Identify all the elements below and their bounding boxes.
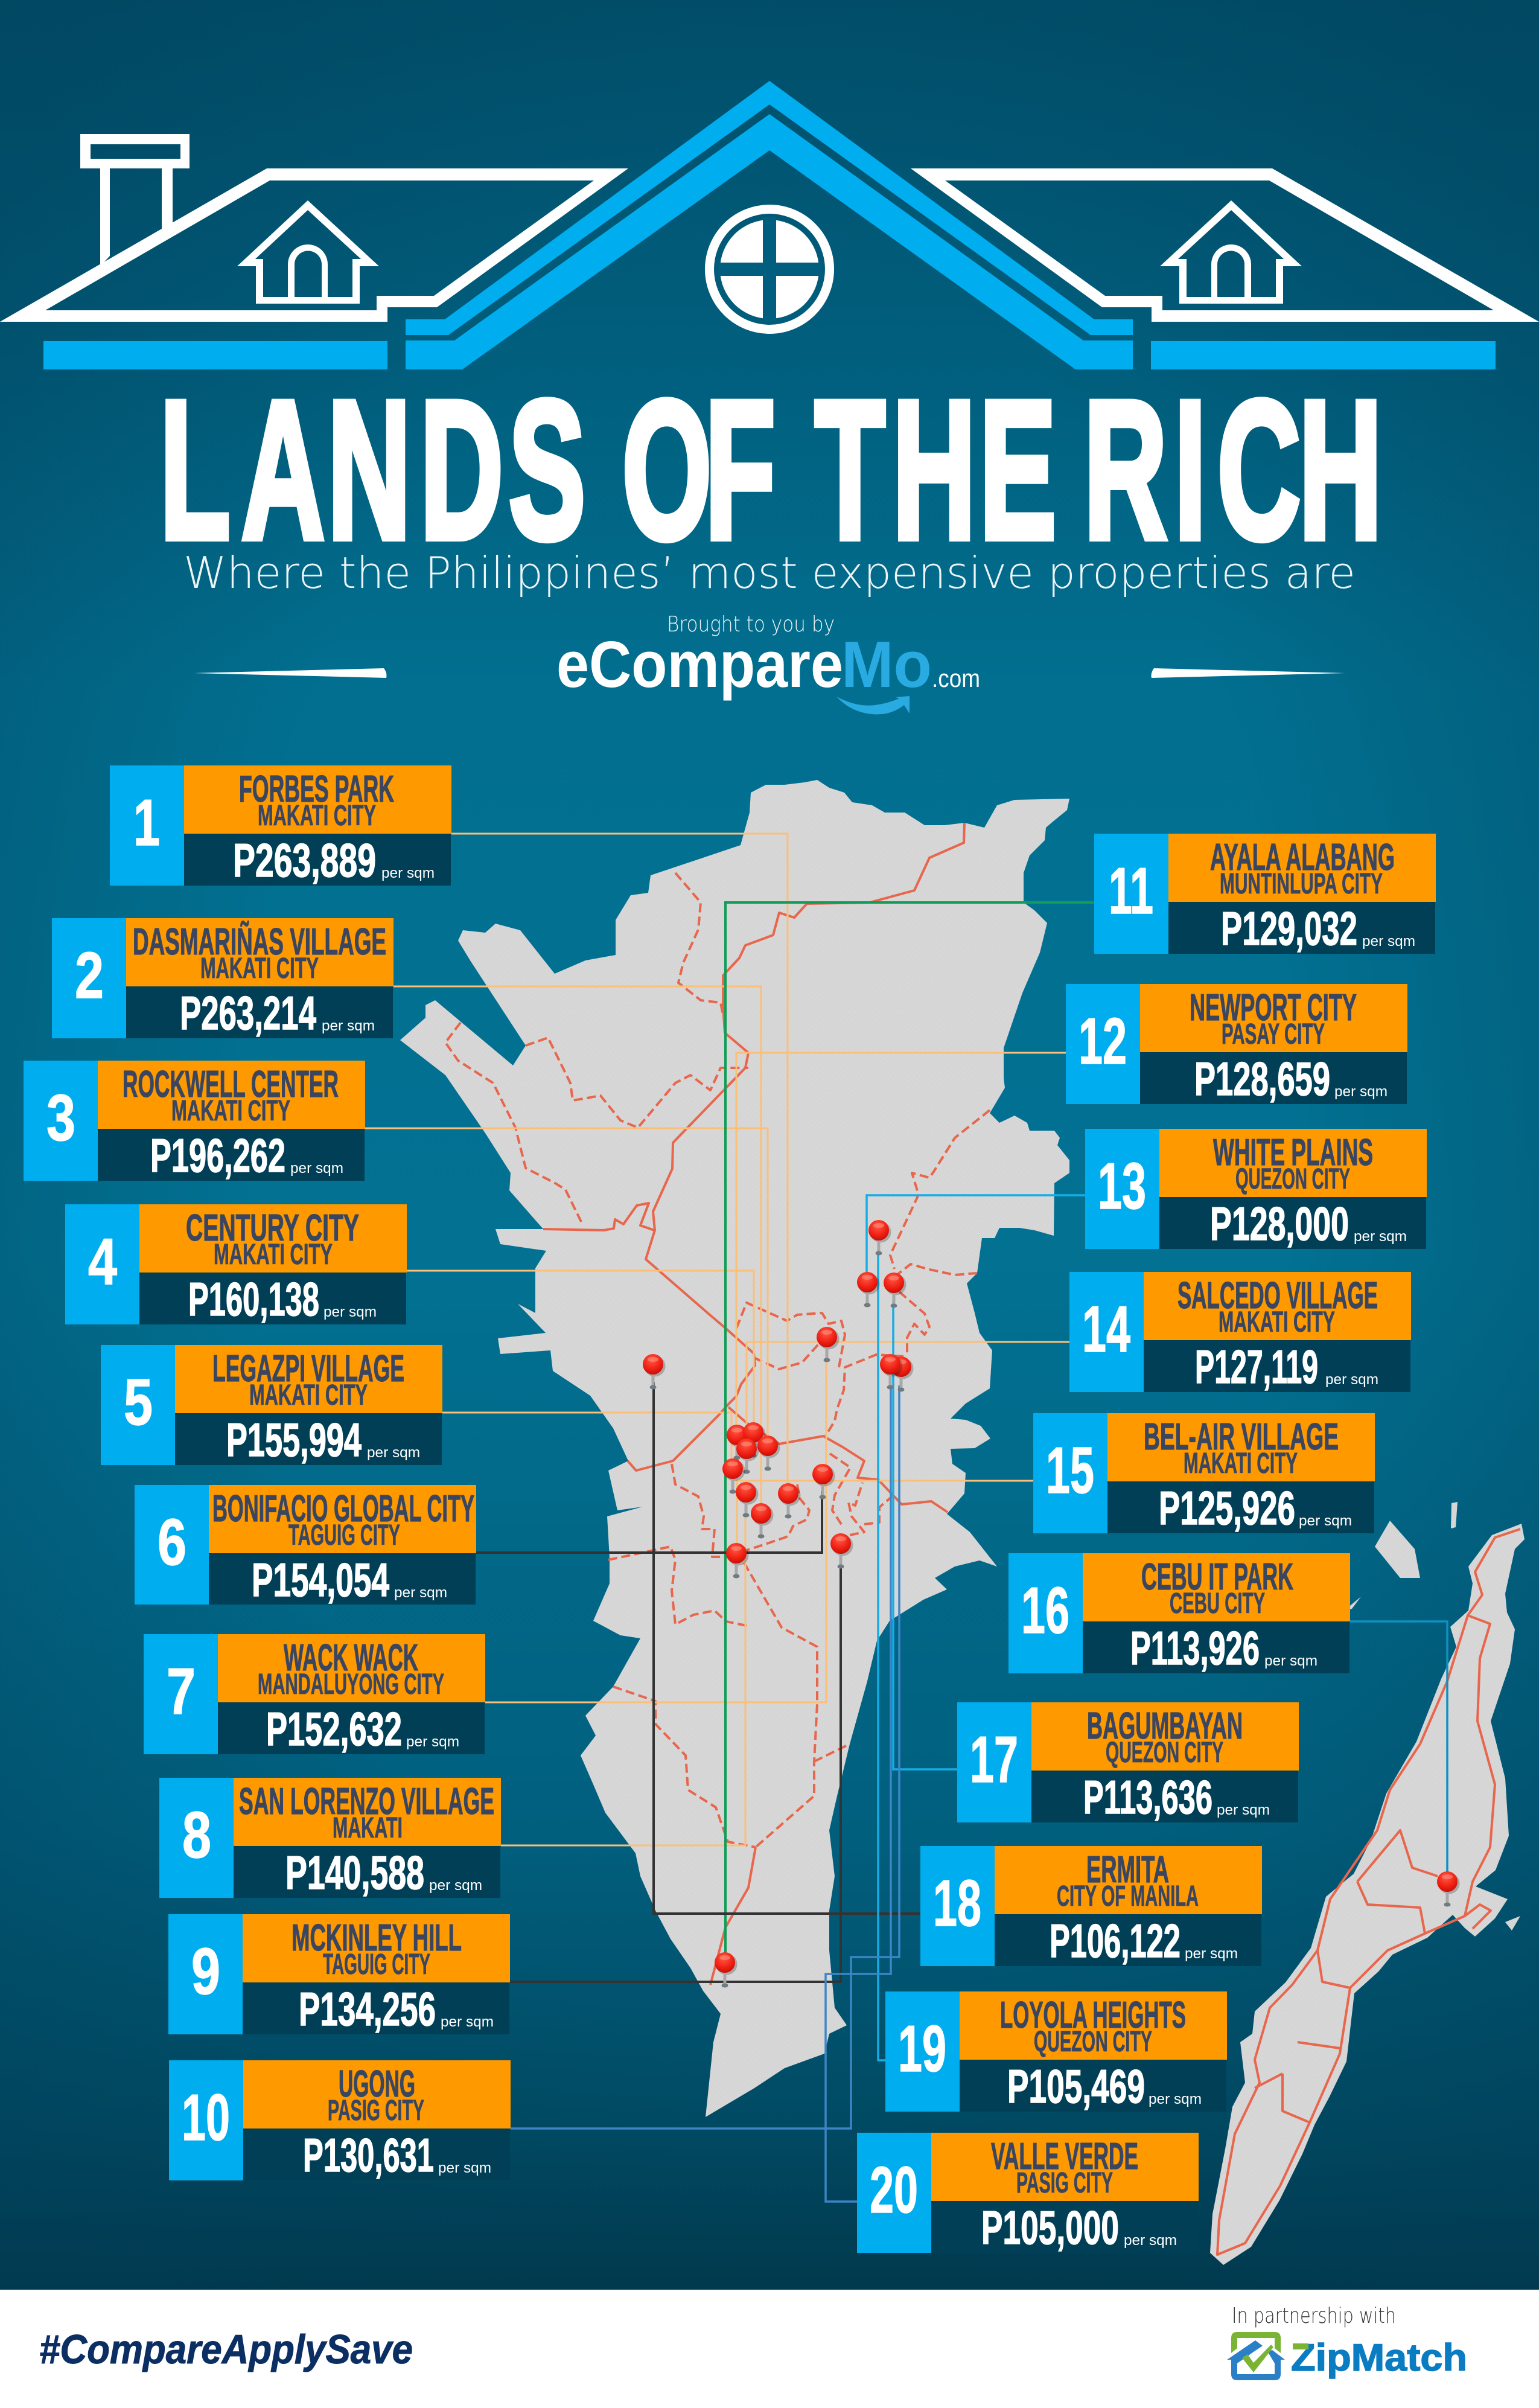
card 9: McKinley Hill: 9 [191,1935,220,2008]
eCompareMo logo [556,628,980,714]
card 12: Newport City: P128,659 [1194,1052,1330,1105]
card 13: White Plains: QUEZON CITY [1235,1163,1350,1195]
connector: card 20 [826,1385,891,2202]
card 1: Forbes Park: 1 [133,786,160,860]
ZipMatch logo: ZipMatch [1291,2337,1467,2379]
card 3: Rockwell Center: 3 [46,1081,75,1155]
card 20: Valle Verde: P105,000 [981,2201,1119,2254]
card 5: Legazpi Village: LEGAZPI VILLAGE [212,1348,404,1390]
connector: card 3 [365,1128,768,1446]
card 14: Salcedo Village: per sqm [1325,1372,1378,1388]
card 11: Ayala Alabang: MUNTINLUPA CITY [1220,868,1383,900]
card 6: Bonifacio Global City [135,1485,476,1606]
card 16: Cebu IT Park: per sqm [1264,1653,1318,1669]
card 11: Ayala Alabang [1094,834,1436,955]
card 16: Cebu IT Park: CEBU CITY [1170,1588,1265,1620]
card 13: White Plains [1085,1129,1427,1250]
card 20: Valle Verde: 20 [870,2153,918,2227]
card 7: Wack Wack: 7 [167,1655,196,1728]
hashtag: #CompareApplySave [39,2327,413,2372]
card 8: San Lorenzo Village: MAKATI [333,1812,403,1844]
card 15: Bel-Air Village: 15 [1046,1434,1094,1507]
round window [710,209,829,330]
card 13: White Plains: 13 [1098,1149,1146,1223]
centre gable inner band [406,114,1133,369]
card 12: Newport City: NEWPORT CITY [1190,987,1357,1029]
card 17: Bagumbayan: QUEZON CITY [1106,1737,1223,1769]
card 1: Forbes Park: FORBES PARK [239,768,394,810]
card 17: Bagumbayan: BAGUMBAYAN [1087,1705,1243,1747]
card 9: McKinley Hill: P134,256 [299,1982,436,2036]
card 19: Loyola Heights: P105,469 [1007,2060,1145,2113]
card 11: Ayala Alabang: AYALA ALABANG [1210,837,1395,878]
card 19: Loyola Heights: QUEZON CITY [1034,2026,1152,2058]
card 18: Ermita: 18 [933,1867,981,1940]
card 8: San Lorenzo Village: 8 [182,1798,211,1872]
card 19: Loyola Heights: LOYOLA HEIGHTS [1000,1994,1186,2036]
card 11: Ayala Alabang: 11 [1109,854,1153,928]
right roof outline [911,168,1539,322]
connector: card 8 [501,1497,745,1845]
eCompareMo logo: .com [932,664,980,692]
map: small islands [1343,1502,1520,1931]
card 18: Ermita: per sqm [1185,1946,1238,1962]
right flourish [1152,668,1345,678]
card 2: Dasmariñas Village: per sqm [322,1018,375,1034]
card 5: Legazpi Village: 5 [124,1365,153,1439]
card 3: Rockwell Center [24,1061,365,1182]
card 13: White Plains: WHITE PLAINS [1213,1132,1373,1174]
connector: card 2 [394,986,761,1509]
card 10: Ugong: PASIG CITY [328,2095,424,2127]
card 3: Rockwell Center: ROCKWELL CENTER [123,1064,339,1105]
connector: card 17 [893,1301,957,1769]
card 20: Valle Verde: per sqm [1124,2232,1177,2249]
connector: card 19 [878,1250,885,2060]
card 20: Valle Verde [857,2133,1199,2254]
card 4: Century City: per sqm [323,1304,377,1320]
ZipMatch logo [1227,2332,1467,2380]
map: Cebu island [1210,1524,1525,2265]
card 11: Ayala Alabang: per sqm [1362,933,1415,950]
card 2: Dasmariñas Village: P263,214 [180,986,316,1040]
map roads: Cebu [1217,1529,1520,2255]
chimney [80,134,190,266]
connector: card 16 [1350,1621,1447,1882]
title: LANDS OF THE RICH [160,360,1382,580]
connector: card 6 [476,1491,822,1553]
footer band [0,2290,1539,2408]
card 17: Bagumbayan: 17 [970,1723,1018,1796]
card 8: San Lorenzo Village: per sqm [429,1877,482,1894]
card 1: Forbes Park: P263,889 [233,834,376,887]
card 8: San Lorenzo Village [159,1778,501,1899]
card 18: Ermita [920,1846,1262,1967]
card 10: Ugong: UGONG [339,2063,415,2105]
left flourish [194,668,386,678]
subtitle: Where the Philippines’ most expensive properties are [183,548,1356,598]
card 9: McKinley Hill: per sqm [441,2014,494,2030]
card 3: Rockwell Center: P196,262 [150,1129,285,1182]
card 17: Bagumbayan: P113,636 [1083,1771,1212,1824]
card 5: Legazpi Village: per sqm [367,1445,420,1461]
card 7: Wack Wack: WACK WACK [284,1637,418,1679]
card 15: Bel-Air Village: per sqm [1299,1513,1352,1529]
card 14: Salcedo Village: SALCEDO VILLAGE [1177,1275,1378,1317]
card 4: Century City: 4 [88,1225,117,1298]
centre gable outer band [406,81,1133,335]
card 15: Bel-Air Village: BEL-AIR VILLAGE [1144,1416,1339,1458]
card 5: Legazpi Village: MAKATI CITY [249,1379,368,1411]
connector: card 12 [736,1053,1066,1435]
card 10: Ugong: per sqm [438,2160,491,2176]
card 18: Ermita: ERMITA [1086,1849,1169,1891]
connector: card 13 [867,1195,1085,1282]
card 9: McKinley Hill: MCKINLEY HILL [292,1917,462,1959]
card 14: Salcedo Village: MAKATI CITY [1219,1306,1335,1338]
card 12: Newport City: PASAY CITY [1222,1018,1325,1050]
card 16: Cebu IT Park: CEBU IT PARK [1141,1556,1293,1598]
card 13: White Plains: P128,000 [1210,1197,1349,1250]
card 4: Century City: CENTURY CITY [186,1207,359,1249]
card 2: Dasmariñas Village: DASMARIÑAS VILLAGE [133,921,386,963]
left dormer [237,200,379,304]
card 13: White Plains: per sqm [1354,1228,1407,1245]
card 12: Newport City: 12 [1079,1004,1127,1078]
card 10: Ugong: P130,631 [303,2129,434,2182]
left roof outline [0,168,628,322]
card 6: Bonifacio Global City: 6 [158,1506,186,1579]
card 15: Bel-Air Village [1033,1413,1375,1535]
connector: card 18 [654,1382,920,1914]
card 17: Bagumbayan [957,1702,1299,1824]
card 19: Loyola Heights: 19 [898,2012,946,2086]
card 6: Bonifacio Global City: per sqm [394,1585,447,1601]
card 20: Valle Verde: VALLE VERDE [991,2136,1138,2177]
card 14: Salcedo Village [1069,1272,1411,1393]
eCompareMo logo: eCompare [556,628,843,701]
card 2: Dasmariñas Village: 2 [75,939,104,1012]
card 2: Dasmariñas Village: MAKATI CITY [200,953,319,985]
card 18: Ermita: P106,122 [1050,1914,1181,1967]
card 19: Loyola Heights [885,1991,1227,2113]
card 14: Salcedo Village: P127,119 [1195,1340,1318,1393]
card 6: Bonifacio Global City: P154,054 [252,1553,389,1606]
card 15: Bel-Air Village: P125,926 [1159,1481,1295,1535]
card 3: Rockwell Center: per sqm [290,1160,343,1177]
connector: card 7 [485,1346,826,1702]
card 16: Cebu IT Park: P113,926 [1130,1621,1260,1675]
card 9: McKinley Hill [168,1914,510,2036]
card 4: Century City [65,1204,407,1326]
card 20: Valle Verde: PASIG CITY [1016,2167,1113,2199]
card 1: Forbes Park: per sqm [381,865,435,881]
card 16: Cebu IT Park [1008,1553,1350,1675]
map pins [643,1220,1459,1987]
card 18: Ermita: CITY OF MANILA [1057,1880,1199,1912]
connector lines [365,834,1447,2202]
right eave bar [1151,341,1496,369]
icon: ZipMatch house [1227,2332,1285,2380]
card 7: Wack Wack: per sqm [406,1734,459,1750]
card 7: Wack Wack: MANDALUYONG CITY [258,1669,444,1701]
card 8: San Lorenzo Village: SAN LORENZO VILLAGE [239,1781,494,1822]
card 6: Bonifacio Global City: TAGUIG CITY [288,1519,400,1551]
brought to you by: Brought to you by [667,612,835,637]
card 17: Bagumbayan: per sqm [1217,1802,1270,1818]
card 5: Legazpi Village [101,1345,442,1466]
card 8: San Lorenzo Village: P140,588 [285,1846,424,1899]
connector: card 15 [737,1481,1033,1551]
card 12: Newport City: per sqm [1334,1084,1388,1100]
card 1: Forbes Park: MAKATI CITY [258,800,376,832]
card 14: Salcedo Village: 14 [1082,1292,1130,1366]
card 7: Wack Wack: P152,632 [266,1702,402,1755]
map roads: main island [445,823,990,1985]
card 2: Dasmariñas Village [52,918,394,1040]
partnership label: In partnership with [1232,2304,1396,2328]
card 9: McKinley Hill: TAGUIG CITY [323,1949,430,1981]
connector: card 14 [747,1342,1069,1449]
connector: card 9 [510,1563,841,1982]
connector: card 5 [442,1413,731,1469]
card 4: Century City: MAKATI CITY [214,1239,333,1271]
left eave bar [43,341,387,369]
card 19: Loyola Heights: per sqm [1149,2091,1202,2107]
connector: card 4 [407,1271,754,1433]
card 3: Rockwell Center: MAKATI CITY [171,1095,290,1127]
card 1: Forbes Park [110,765,451,887]
card 12: Newport City [1066,984,1407,1105]
house roof illustration [0,81,1539,369]
card 10: Ugong: 10 [182,2081,230,2154]
card 11: Ayala Alabang: P129,032 [1221,902,1357,955]
connector: card 1 [451,834,788,1485]
connector: card 10 [511,1385,899,2129]
map: main island [400,780,1069,2117]
card 6: Bonifacio Global City: BONIFACIO GLOBAL CITY [212,1488,474,1530]
card 7: Wack Wack [144,1634,485,1755]
card 4: Century City: P160,138 [188,1273,319,1326]
card 16: Cebu IT Park: 16 [1021,1574,1069,1647]
card 10: Ugong [169,2060,511,2182]
card 5: Legazpi Village: P155,994 [226,1413,362,1466]
eCompareMo logo: Mo [841,628,932,701]
card 15: Bel-Air Village: MAKATI CITY [1184,1448,1298,1480]
connector: card 11 [725,902,1094,1963]
right dormer [1160,200,1302,304]
